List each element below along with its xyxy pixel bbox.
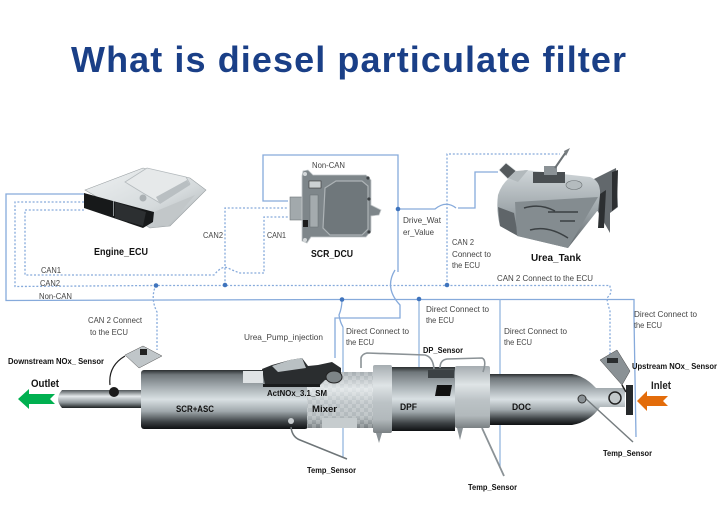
- signal labels: the ECU: [504, 337, 532, 347]
- signal labels: Direct Connect to: [426, 304, 489, 314]
- signal labels: Connect to: [452, 249, 491, 259]
- downstream NOx sensor: [109, 346, 162, 397]
- signal labels: CAN 2: [452, 237, 474, 247]
- front flange: [373, 365, 392, 433]
- icon: Urea tank: [497, 148, 618, 248]
- icon: SCR DCU: [290, 170, 381, 243]
- title: What is diesel particulate filter: [71, 39, 626, 80]
- signal labels: CAN1: [267, 230, 286, 240]
- sensor labels: Downstream NOx_ Sensor: [8, 357, 104, 366]
- signal labels: Urea_Pump_injection: [244, 332, 323, 342]
- component labels: Urea_Tank: [531, 252, 581, 264]
- arrow: outlet: [18, 389, 55, 409]
- signal labels: CAN 2 Connect: [88, 315, 143, 325]
- mixer section: [307, 372, 374, 428]
- sensor labels: Temp_Sensor: [307, 466, 356, 475]
- urea pump: [243, 358, 342, 387]
- component labels: DOC: [512, 402, 531, 413]
- signal labels: [39, 160, 697, 347]
- outlet pipe: [58, 390, 141, 408]
- sensor labels: Temp_Sensor: [468, 483, 517, 492]
- signal labels: Direct Connect to: [346, 326, 409, 336]
- component labels: Mixer: [312, 404, 337, 415]
- exhaust aftertreatment assembly: [58, 346, 633, 476]
- signal labels: CAN1: [41, 265, 61, 275]
- signal labels: Direct Connect to: [634, 309, 697, 319]
- inlet end: [626, 385, 633, 415]
- component labels: DPF: [400, 402, 417, 413]
- signal labels: CAN2: [40, 278, 60, 288]
- signal labels: er_Value: [403, 227, 434, 237]
- signal labels: the ECU: [634, 320, 662, 330]
- signal labels: CAN2: [203, 230, 223, 240]
- signal labels: the ECU: [346, 337, 374, 347]
- SCR+ASC can: [141, 370, 308, 429]
- component labels: Outlet: [31, 378, 59, 390]
- signal labels: CAN 2 Connect to the ECU: [497, 273, 593, 283]
- wiring: connections between components: [6, 154, 636, 468]
- signal labels: Non-CAN: [39, 291, 72, 301]
- DOC can: [490, 374, 625, 425]
- temp sensor probes: [288, 395, 633, 476]
- signal labels: Non-CAN: [312, 160, 345, 170]
- sensor labels: [8, 346, 717, 492]
- signal labels: Drive_Wat: [403, 215, 442, 225]
- sensor labels: DP_Sensor: [423, 346, 463, 355]
- component labels: Engine_ECU: [94, 246, 148, 258]
- icon: Engine ECU: [84, 168, 206, 228]
- rear flange: [455, 366, 490, 428]
- sensor labels: Temp_Sensor: [603, 449, 652, 458]
- signal labels: the ECU: [426, 315, 454, 325]
- component labels: ActNOx_3.1_SM: [267, 388, 327, 398]
- DPF can: [392, 367, 455, 431]
- arrow: inlet: [637, 391, 668, 411]
- upstream NOx sensor: [600, 350, 630, 404]
- component labels: [31, 246, 671, 415]
- signal labels: the ECU: [452, 260, 480, 270]
- component labels: Inlet: [651, 380, 671, 392]
- pressure lines: [361, 353, 485, 372]
- sensor labels: Upstream NOx_ Sensor: [632, 362, 717, 371]
- signal labels: Direct Connect to: [504, 326, 567, 336]
- DPF hardware: [428, 370, 454, 396]
- signal labels: to the ECU: [90, 327, 128, 337]
- component labels: SCR_DCU: [311, 248, 353, 260]
- component labels: SCR+ASC: [176, 404, 214, 414]
